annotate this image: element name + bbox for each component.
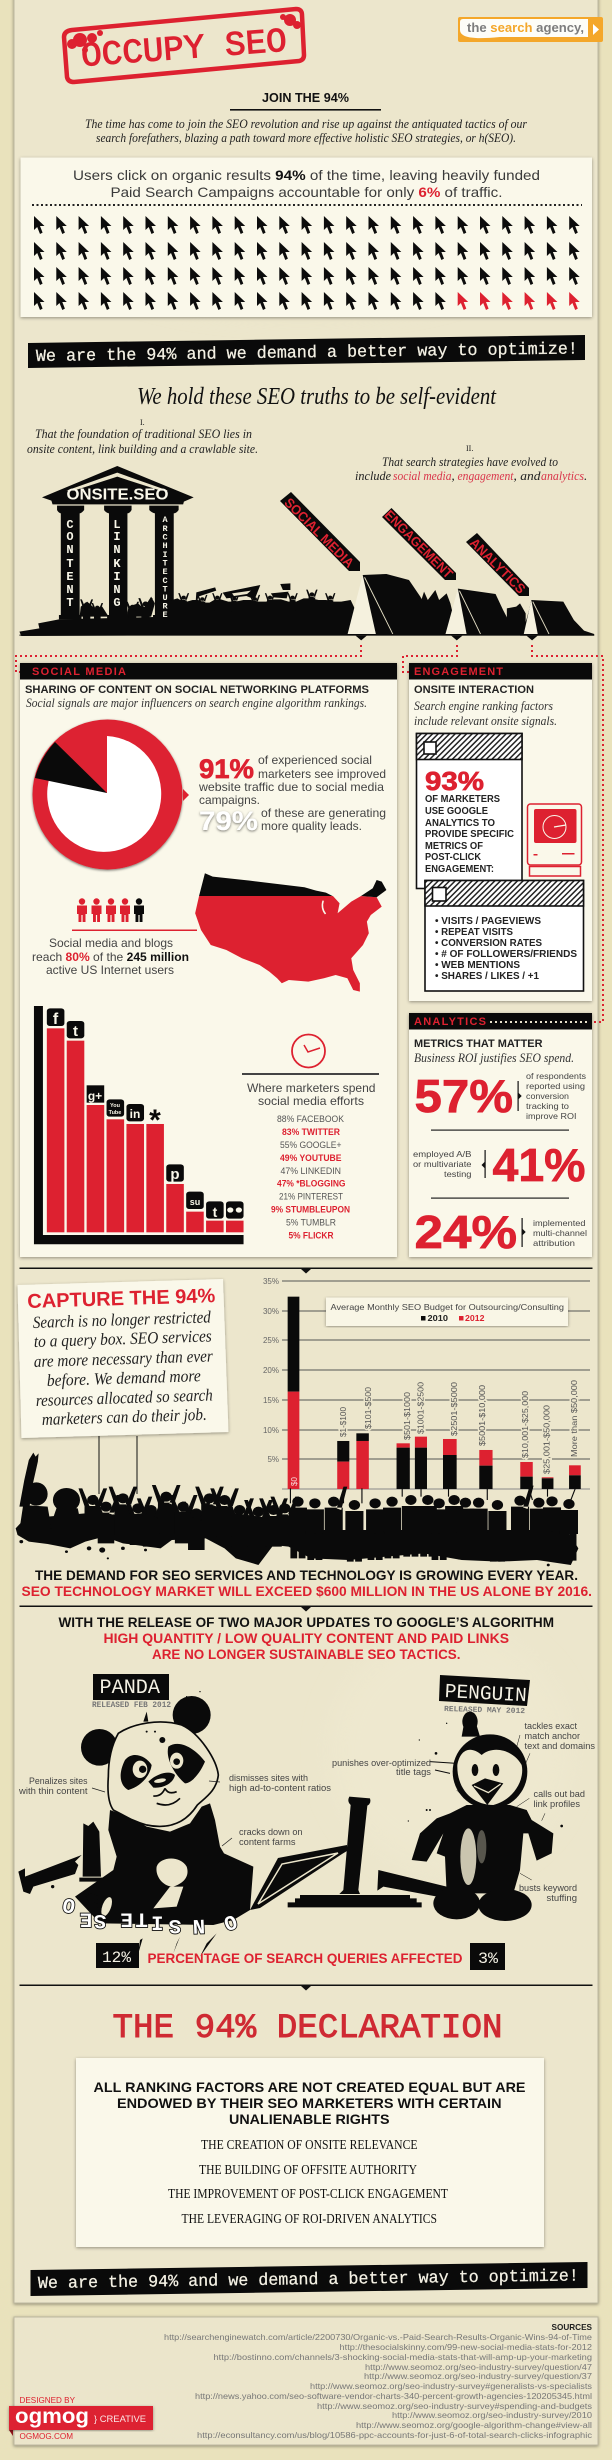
architecture label: E bbox=[162, 610, 168, 620]
illustration: panda smashing temple: O bbox=[61, 1891, 77, 1916]
sources list: http://www.seomoz.org/seo-industry-survey/question/47 bbox=[365, 2362, 592, 2372]
window: 93% stat: ENGAGEMENT: bbox=[425, 864, 494, 875]
illustration: panda smashing temple: I bbox=[151, 1910, 164, 1933]
annotations: panda and penguin: calls out bad bbox=[534, 1789, 585, 1799]
dotted red connectors bbox=[16, 645, 603, 1022]
truth II text: That search strategies have evolved to bbox=[382, 454, 558, 469]
sources list: http://www.seomoz.org/seo-industry-survey/question/37 bbox=[364, 2371, 592, 2381]
stat: 41%: testing bbox=[444, 1169, 472, 1179]
column labels: K bbox=[113, 557, 121, 571]
annotations: panda and penguin: tackles exact bbox=[524, 1721, 578, 1731]
stat: 24%: 24% bbox=[414, 1206, 517, 1258]
subheading: ONSITE INTERACTION bbox=[414, 684, 534, 696]
column labels: I bbox=[113, 530, 121, 544]
axis labels: 10% bbox=[263, 1426, 279, 1435]
caption: queries affected: PERCENTAGE OF SEARCH QUERIES AFFECTED bbox=[148, 1951, 463, 1966]
subheading: SHARING OF CONTENT ON SOCIAL NETWORKING PLATFORMS bbox=[25, 684, 369, 696]
architecture label: E bbox=[162, 567, 168, 577]
truth II text: engagement bbox=[458, 468, 514, 483]
axis labels: 25% bbox=[263, 1336, 279, 1345]
gridlines and axis bbox=[282, 1281, 590, 1489]
annotations: panda and penguin: high ad-to-content ratios bbox=[229, 1783, 332, 1793]
efforts list: 21% PINTEREST bbox=[279, 1192, 343, 1202]
stamp: Occupy SEO bbox=[64, 9, 304, 82]
stat: 57% bbox=[414, 1070, 586, 1122]
efforts list: 83% TWITTER bbox=[282, 1127, 340, 1137]
efforts list: 5% TUMBLR bbox=[286, 1218, 336, 1228]
window: metric list: • REPEAT VISITS bbox=[435, 927, 513, 938]
illustration: fallen pediment and standing column bbox=[250, 1797, 422, 1910]
intro paragraph bbox=[85, 116, 528, 145]
algorithm update heading: HIGH QUANTITY / LOW QUALITY CONTENT AND PAID LINKS bbox=[104, 1631, 509, 1646]
stat: 24%: implemented bbox=[533, 1218, 586, 1228]
axis labels: 30% bbox=[263, 1307, 279, 1316]
algorithm update heading bbox=[58, 1615, 554, 1662]
window: 93% stat: ANALYTICS TO bbox=[425, 818, 495, 829]
social icon letters: You bbox=[110, 1103, 120, 1109]
window: metric list: • # OF FOLLOWERS/FRIENDS bbox=[435, 949, 577, 960]
efforts list bbox=[247, 1081, 376, 1240]
label: penguin: PENGUIN bbox=[444, 1681, 527, 1708]
sources list: http://thesocialskinny.com/99-new-social-media-stats-for-2012 bbox=[340, 2342, 592, 2352]
map: United States bbox=[195, 873, 386, 992]
subheading: include relevant onsite signals. bbox=[414, 713, 557, 728]
axis labels bbox=[263, 1277, 279, 1464]
column labels: E bbox=[66, 570, 74, 584]
efforts list: 49% YOUTUBE bbox=[280, 1153, 342, 1163]
window: metric list: • CONVERSION RATES bbox=[435, 938, 542, 949]
ribbon: we are the 94%: We are the 94% and we demand a better way to optimize! bbox=[36, 340, 578, 367]
annotations: panda and penguin: text and domains bbox=[524, 1741, 596, 1751]
silhouette: temple, crowd, tents bbox=[19, 466, 594, 640]
subheading bbox=[414, 1038, 574, 1065]
column labels: O bbox=[66, 530, 74, 544]
protest sign: capture the 94%: marketers can do their job. bbox=[42, 1405, 207, 1429]
stat: 57%: improve ROI bbox=[526, 1111, 576, 1121]
efforts list: 47% *BLOGGING bbox=[277, 1178, 346, 1188]
column labels: N bbox=[66, 543, 74, 557]
panel: engagement bbox=[409, 663, 592, 1001]
window: 93% stat: PROVIDE SPECIFIC bbox=[425, 829, 514, 840]
stat: social reach bbox=[32, 936, 189, 977]
stat: 41% bbox=[413, 1139, 586, 1191]
architecture label bbox=[162, 515, 168, 620]
demand statement bbox=[22, 1568, 592, 1599]
label: penguin bbox=[439, 1675, 530, 1716]
stamp: Occupy SEO: OCCUPY SEO bbox=[80, 24, 288, 77]
stat: 12% panda queries bbox=[96, 1943, 139, 1968]
subheading bbox=[25, 684, 369, 710]
subheading: Social signals are major influencers on search engine algorithm rankings. bbox=[26, 695, 367, 710]
efforts list: 55% GOOGLE+ bbox=[280, 1140, 342, 1150]
annotations: panda and penguin: dismisses sites with bbox=[229, 1773, 308, 1783]
arrow sign: social media: SOCIAL MEDIA bbox=[281, 495, 357, 571]
bar labels: $1001-$2500 bbox=[416, 1382, 426, 1434]
stat: 57%: conversion bbox=[526, 1091, 569, 1101]
demand statement: SEO TECHNOLOGY MARKET WILL EXCEED $600 MILLION IN THE US ALONE BY 2016. bbox=[22, 1584, 592, 1599]
stat: 24% bbox=[414, 1206, 587, 1258]
sources list: http://www.seomoz.org/seo-industry-survey/2010 bbox=[392, 2410, 592, 2420]
efforts list: 88% FACEBOOK bbox=[277, 1114, 344, 1124]
arrow sign: analytics: ANALYTICS bbox=[467, 535, 528, 597]
legend: Average Monthly SEO Budget for Outsourcing/Consulting bbox=[330, 1302, 564, 1312]
column labels: T bbox=[66, 596, 74, 610]
panel: social media bbox=[20, 663, 397, 1257]
annotations: panda and penguin bbox=[18, 1721, 596, 1903]
architecture label: R bbox=[162, 602, 168, 612]
efforts list: social media efforts bbox=[258, 1094, 364, 1108]
icon: computer bbox=[528, 804, 582, 876]
truth I text: That the foundation of traditional SEO lies in bbox=[35, 426, 252, 441]
logo: ogmog creative: OGMOG.COM bbox=[20, 2431, 73, 2441]
icon row: people 4 of 5 bbox=[72, 898, 197, 931]
window: metric list: • WEB MENTIONS bbox=[435, 960, 520, 971]
stat: 41%: employed A/B bbox=[413, 1149, 472, 1159]
label: penguin: RELEASED MAY 2012 bbox=[444, 1706, 525, 1716]
illustration: panda smashing temple: S bbox=[169, 1913, 181, 1936]
stat: 91% and 79%: marketers see improved bbox=[258, 767, 386, 781]
stat: 57%: of respondents bbox=[526, 1071, 586, 1081]
sources list bbox=[164, 2322, 593, 2440]
sources list: http://bostinno.com/channels/3-shocking-social-media-stats-that-will-amp-up-your-marketing bbox=[214, 2352, 592, 2362]
stat: 12% panda queries: 12% bbox=[102, 1949, 131, 1967]
social icon letters bbox=[53, 1011, 218, 1220]
bar chart: monthly SEO budget: $0 bbox=[290, 1477, 299, 1486]
axis labels: 5% bbox=[267, 1455, 279, 1464]
protest sign: capture the 94%: Search is no longer restricted bbox=[33, 1307, 211, 1332]
window: metric list: • SHARES / LIKES / +1 bbox=[435, 971, 539, 982]
annotations: panda and penguin: with thin content bbox=[18, 1786, 88, 1796]
column labels: N bbox=[113, 543, 121, 557]
architecture label: C bbox=[162, 532, 168, 542]
header: analytics: ANALYTICS bbox=[414, 1016, 486, 1028]
truth II text: , bbox=[452, 468, 455, 483]
column labels bbox=[66, 518, 121, 610]
illustration: panda smashing temple: S bbox=[94, 1908, 106, 1931]
protest sign: capture the 94%: CAPTURE THE 94% bbox=[27, 1285, 216, 1313]
architecture label: H bbox=[162, 541, 168, 551]
bar labels: $501-$1000 bbox=[402, 1392, 412, 1440]
efforts list: Where marketers spend bbox=[247, 1081, 376, 1095]
rights list: THE CREATION OF ONSITE RELEVANCE bbox=[201, 2137, 418, 2152]
annotations: panda and penguin: content farms bbox=[239, 1837, 296, 1847]
legend: 2010 bbox=[428, 1313, 448, 1323]
annotations: panda and penguin: match anchor bbox=[524, 1731, 580, 1741]
social icon letters: * bbox=[149, 1104, 161, 1137]
illustration: panda smashing temple: T bbox=[135, 1906, 148, 1929]
sources list: http://www.seomoz.org/seo-industry-survey#spending-and-budgets bbox=[317, 2401, 592, 2411]
crowd silhouette bbox=[16, 1453, 578, 1566]
heading: the 94% declaration: THE 94% DECLARATION bbox=[112, 2010, 502, 2048]
truth II text bbox=[355, 444, 587, 483]
window: 93% stat: USE GOOGLE bbox=[425, 806, 488, 817]
stat: 3% penguin queries bbox=[470, 1943, 505, 1970]
stat: social reach: Social media and blogs bbox=[49, 936, 173, 950]
bar chart: monthly SEO budget bbox=[263, 1277, 590, 1489]
logo: ogmog creative bbox=[9, 2395, 153, 2441]
stat: 91% and 79%: campaigns. bbox=[199, 793, 260, 807]
label: panda: PANDA bbox=[100, 1677, 160, 1700]
declaration statement: ENDOWED BY THEIR SEO MARKETERS WITH CERTAIN bbox=[117, 2095, 501, 2111]
illustration: panda smashing temple: E bbox=[80, 1906, 92, 1929]
truth I text: onsite content, link building and a crawlable site. bbox=[27, 441, 258, 456]
architecture label: C bbox=[162, 576, 168, 586]
bar labels bbox=[338, 1380, 579, 1474]
intro paragraph: search forefathers, blazing a path toward more effective holistic SEO strategies, or h(SEO). bbox=[96, 130, 516, 145]
stat: social reach: active US Internet users bbox=[46, 963, 174, 977]
architecture label: A bbox=[162, 515, 168, 525]
axis labels: 15% bbox=[263, 1396, 279, 1405]
stat: 91% and 79%: of experienced social bbox=[258, 753, 372, 767]
window: metric list bbox=[425, 880, 584, 991]
panel: click stats with cursors bbox=[20, 158, 592, 317]
stat: 91% and 79% bbox=[198, 753, 386, 836]
stat: 91% and 79%: 91% bbox=[199, 754, 254, 784]
bar labels: $2501-$5000 bbox=[449, 1382, 459, 1436]
bar labels: $1-$100 bbox=[338, 1407, 348, 1437]
logo: the search agency bbox=[458, 17, 603, 42]
stat: 57%: tracking to bbox=[526, 1101, 569, 1111]
annotations: panda and penguin: stuffing bbox=[546, 1893, 577, 1903]
architecture label: U bbox=[162, 593, 168, 603]
truth II text: II. bbox=[466, 444, 473, 453]
demand statement: THE DEMAND FOR SEO SERVICES AND TECHNOLOGY IS GROWING EVERY YEAR. bbox=[35, 1568, 578, 1583]
truth I text bbox=[27, 418, 258, 456]
temple label: ONSITE.SEO bbox=[66, 486, 168, 504]
stat: 57%: reported using bbox=[526, 1081, 585, 1091]
social icon letters: Tube bbox=[109, 1110, 121, 1116]
stat: 41%: 41% bbox=[492, 1139, 586, 1191]
architecture label: I bbox=[162, 550, 168, 560]
protest sign: capture the 94%: before. We demand more bbox=[47, 1366, 201, 1390]
social icon letters: t bbox=[213, 1204, 218, 1220]
social icon letters: g+ bbox=[88, 1089, 102, 1103]
algorithm update heading: WITH THE RELEASE OF TWO MAJOR UPDATES TO GOOGLE’S ALGORITHM bbox=[58, 1615, 554, 1630]
logo: the search agency: the search agency, bbox=[467, 21, 584, 35]
heading: Join the 94%: JOIN THE 94% bbox=[262, 91, 349, 105]
bar labels: $10,001-$25,000 bbox=[520, 1391, 530, 1458]
architecture label: T bbox=[162, 584, 168, 594]
panel: declaration bbox=[76, 2058, 544, 2247]
illustration: panda smashing temple: N bbox=[192, 1913, 205, 1936]
social icon letters: p bbox=[170, 1166, 180, 1183]
column labels: T bbox=[66, 557, 74, 571]
window: 93% stat: 93% bbox=[425, 766, 484, 796]
bar labels: $25,001-$50,000 bbox=[542, 1405, 552, 1474]
social icon letters: in bbox=[130, 1107, 140, 1121]
stat: 91% and 79%: 79% bbox=[199, 806, 258, 836]
truth II text: analytics bbox=[541, 468, 584, 483]
bar chart: where marketers spend bbox=[34, 1006, 244, 1244]
annotations: panda and penguin: busts keyword bbox=[519, 1883, 577, 1893]
subheading: METRICS THAT MATTER bbox=[414, 1038, 543, 1050]
legend: 2012 bbox=[465, 1313, 485, 1323]
social icon letters: t bbox=[73, 1023, 78, 1040]
stat: 24%: attribution bbox=[533, 1238, 575, 1248]
section divider bbox=[20, 1984, 592, 1990]
illustration: penguin bbox=[377, 1712, 563, 1921]
pie chart: 91% bbox=[32, 720, 189, 870]
stat: 24%: multi-channel bbox=[533, 1228, 587, 1238]
temple: onsite SEO with crowd and tents bbox=[19, 466, 594, 640]
subheading: Business ROI justifies SEO spend. bbox=[414, 1050, 574, 1065]
stat: 41%: or multivariate bbox=[413, 1159, 472, 1169]
architecture label: T bbox=[162, 558, 168, 568]
sources list: http://www.seomoz.org/google-algorithm-change#view-all bbox=[356, 2420, 592, 2430]
annotations: panda and penguin: cracks down on bbox=[239, 1827, 303, 1837]
column labels: N bbox=[113, 583, 121, 597]
header: engagement: ENGAGEMENT bbox=[414, 666, 503, 678]
illustration: panda smashing temple bbox=[18, 1691, 253, 1957]
social icon letters: f bbox=[53, 1011, 59, 1028]
bars bbox=[288, 1297, 581, 1489]
truth II text: social media bbox=[393, 468, 452, 483]
truth I text: I. bbox=[140, 418, 145, 427]
window: metric list: • VISITS / PAGEVIEWS bbox=[435, 916, 541, 927]
bar labels: $5001-$10,000 bbox=[477, 1385, 487, 1446]
bar labels: $101-$500 bbox=[363, 1387, 373, 1429]
truth II text: include bbox=[355, 468, 391, 483]
axis labels: 35% bbox=[263, 1277, 279, 1286]
annotations: panda and penguin: title tags bbox=[396, 1767, 432, 1777]
stat: 3% penguin queries: 3% bbox=[478, 1950, 498, 1968]
efforts list: 5% FLICKR bbox=[288, 1230, 334, 1240]
window: 93% stat: METRICS OF bbox=[425, 841, 483, 852]
efforts list: 47% LINKEDIN bbox=[280, 1166, 341, 1176]
panel: analytics bbox=[409, 1013, 592, 1258]
sources list: http://news.yahoo.com/seo-software-vendor-charts-340-percent-growth-agencies-120205345.html bbox=[195, 2391, 592, 2401]
window: 93% stat: OF MARKETERS bbox=[425, 794, 500, 805]
axis labels: 20% bbox=[263, 1366, 279, 1375]
sources list: http://econsultancy.com/us/blog/10586-ppc-accounts-for-just-6-of-total-search-clicks-infographic bbox=[197, 2430, 593, 2440]
click stat text: Paid Search Campaigns accountable for only 6% of traffic. bbox=[110, 184, 502, 200]
click stat text: Users click on organic results 94% of the time, leaving heavily funded bbox=[73, 167, 540, 183]
illustration: panda smashing temple: O bbox=[220, 1908, 240, 1934]
rights list bbox=[168, 2137, 449, 2226]
intro paragraph: The time has come to join the SEO revolution and rise up against the antiquated tactics of our bbox=[85, 116, 528, 131]
stat: 91% and 79%: more quality leads. bbox=[261, 819, 362, 833]
label: panda: RELEASED FEB 2012 bbox=[92, 1702, 171, 1710]
logo: ogmog creative: ogmog bbox=[15, 2405, 89, 2428]
sources list: SOURCES bbox=[552, 2322, 592, 2332]
rights list: THE IMPROVEMENT OF POST-CLICK ENGAGEMENT bbox=[168, 2186, 449, 2201]
protest sign: capture the 94%: are more necessary than ever bbox=[34, 1346, 213, 1371]
stat: social reach: reach 80% of the 245 million bbox=[32, 950, 189, 964]
ribbon: we are the 94% repeated: We are the 94% and we demand a better way to optimize! bbox=[38, 2267, 579, 2294]
truth II text: , and bbox=[514, 468, 541, 483]
architecture label: R bbox=[162, 524, 168, 534]
subheading: Search engine ranking factors bbox=[414, 698, 553, 713]
legend bbox=[326, 1298, 568, 1326]
bar labels: More than $50,000 bbox=[569, 1380, 579, 1457]
section divider bbox=[20, 1268, 592, 1274]
protest sign posts bbox=[98, 1436, 138, 1494]
column labels: L bbox=[113, 518, 121, 532]
social icon letters: su bbox=[190, 1197, 200, 1207]
window: 93% stat: POST-CLICK bbox=[425, 852, 482, 863]
protest sign: capture the 94%: to a query box. SEO services bbox=[34, 1326, 212, 1351]
protest sign: capture the 94%: resources allocated so search bbox=[36, 1385, 213, 1410]
window: 93% stat bbox=[416, 734, 522, 888]
column labels: C bbox=[66, 518, 74, 532]
annotations: panda and penguin: Penalizes sites bbox=[29, 1776, 88, 1786]
column labels: N bbox=[66, 583, 74, 597]
rights list: THE LEVERAGING OF ROI-DRIVEN ANALYTICS bbox=[182, 2211, 437, 2226]
column labels: I bbox=[113, 570, 121, 584]
annotations: panda and penguin: link profiles bbox=[534, 1799, 581, 1809]
algorithm update heading: ARE NO LONGER SUSTAINABLE SEO TACTICS. bbox=[152, 1647, 460, 1662]
sources list: http://searchenginewatch.com/article/2200730/Organic-vs.-Paid-Search-Results-Organic-Wins-94-of-Time bbox=[164, 2332, 592, 2342]
heading: self-evident truths: We hold these SEO truths to be self-evident bbox=[137, 384, 497, 410]
section divider bbox=[20, 1606, 592, 1612]
protest sign: capture the 94% bbox=[18, 1279, 228, 1438]
logo: ogmog creative: } CREATIVE bbox=[94, 2414, 146, 2425]
declaration statement: ALL RANKING FACTORS ARE NOT CREATED EQUAL BUT ARE bbox=[94, 2079, 526, 2095]
header: social media: SOCIAL MEDIA bbox=[32, 666, 126, 678]
truth II text: . bbox=[584, 468, 587, 483]
sources list: http://www.seomoz.org/seo-industry-survey#generalists-vs-specialists bbox=[310, 2381, 592, 2391]
click stat text bbox=[73, 167, 540, 200]
declaration statement bbox=[94, 2079, 526, 2127]
stat: 91% and 79%: of these are generating bbox=[261, 806, 386, 820]
efforts list: 9% STUMBLEUPON bbox=[271, 1204, 350, 1214]
illustration: panda smashing temple: E bbox=[120, 1906, 133, 1929]
column labels: G bbox=[113, 596, 121, 610]
sources paper panel bbox=[14, 2317, 598, 2445]
arrow sign: engagement: ENGAGEMENT bbox=[382, 507, 456, 582]
logo: ogmog creative: DESIGNED BY bbox=[20, 2395, 75, 2405]
stat: 57%: 57% bbox=[414, 1070, 513, 1122]
subheading bbox=[414, 684, 557, 728]
label: panda bbox=[92, 1674, 171, 1710]
icon: clock bbox=[292, 1034, 325, 1068]
stat: 91% and 79%: website traffic due to social media bbox=[198, 780, 384, 794]
rights list: THE BUILDING OF OFFSITE AUTHORITY bbox=[199, 2162, 417, 2177]
cursor pictogram: 94 black, 6 red bbox=[34, 216, 580, 310]
annotations: panda and penguin: punishes over-optimized bbox=[332, 1758, 431, 1768]
declaration statement: UNALIENABLE RIGHTS bbox=[229, 2111, 390, 2127]
